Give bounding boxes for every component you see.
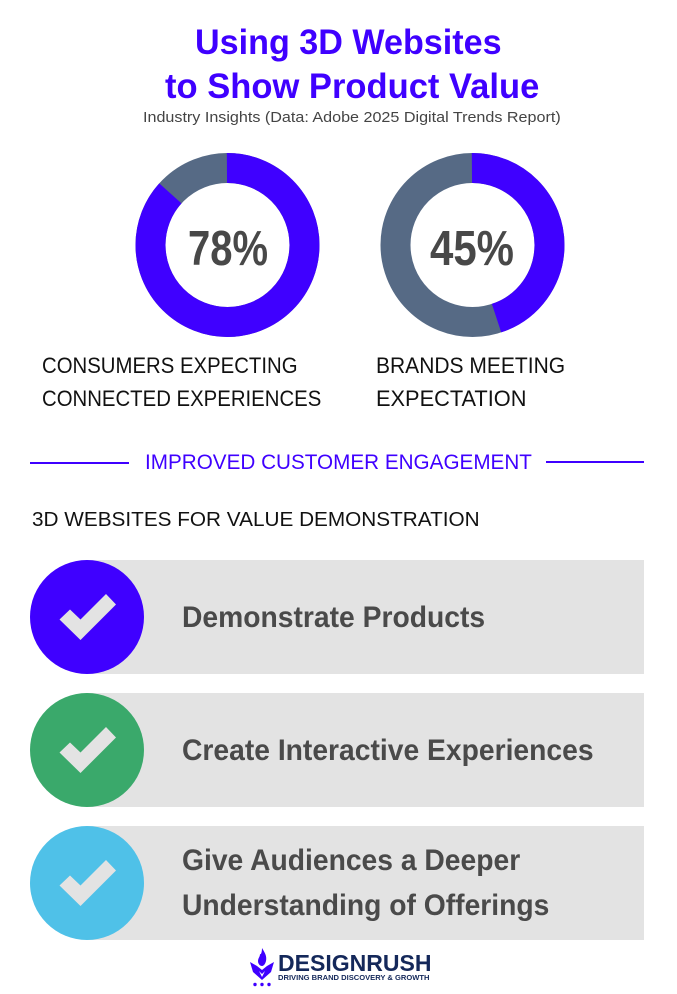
icon: purple check (30, 560, 144, 674)
title (165, 23, 539, 106)
wordmark: DESIGNRUSH (278, 950, 432, 976)
caption: brands meeting: BRANDS MEETING (376, 353, 565, 378)
label: Give Audiences a Deeper (182, 844, 520, 877)
icon: green check (30, 693, 144, 807)
title: Using 3D Websites (195, 23, 502, 62)
donut chart: 78% (136, 153, 320, 337)
section heading: 3D WEBSITES FOR VALUE DEMONSTRATION (32, 508, 480, 531)
row: deeper understanding (30, 826, 644, 940)
caption: consumers expecting (42, 353, 321, 411)
caption: consumers expecting: CONSUMERS EXPECTING (42, 353, 298, 378)
label: Create Interactive Experiences (182, 734, 594, 767)
icon: flame and chevron (250, 948, 274, 986)
section divider heading: IMPROVED CUSTOMER ENGAGEMENT (145, 451, 532, 474)
donut chart: 45% (380, 153, 564, 337)
row: interactive experiences (30, 693, 644, 807)
caption: brands meeting (376, 353, 565, 411)
label: Demonstrate Products (182, 601, 485, 634)
title: to Show Product Value (165, 67, 539, 106)
row: demonstrate products (30, 560, 644, 674)
donut chart: 78%: 78% (188, 222, 268, 276)
caption: brands meeting: EXPECTATION (376, 386, 526, 411)
tagline: DRIVING BRAND DISCOVERY & GROWTH (278, 973, 430, 982)
subtitle: Industry Insights (Data: Adobe 2025 Digital Trends Report) (143, 109, 561, 126)
label (182, 844, 549, 922)
caption: consumers expecting: CONNECTED EXPERIENCES (42, 386, 321, 411)
donut chart: 45%: 45% (430, 222, 514, 276)
icon: blue check (30, 826, 144, 940)
label: Understanding of Offerings (182, 889, 549, 922)
logo: designrush (250, 948, 432, 986)
